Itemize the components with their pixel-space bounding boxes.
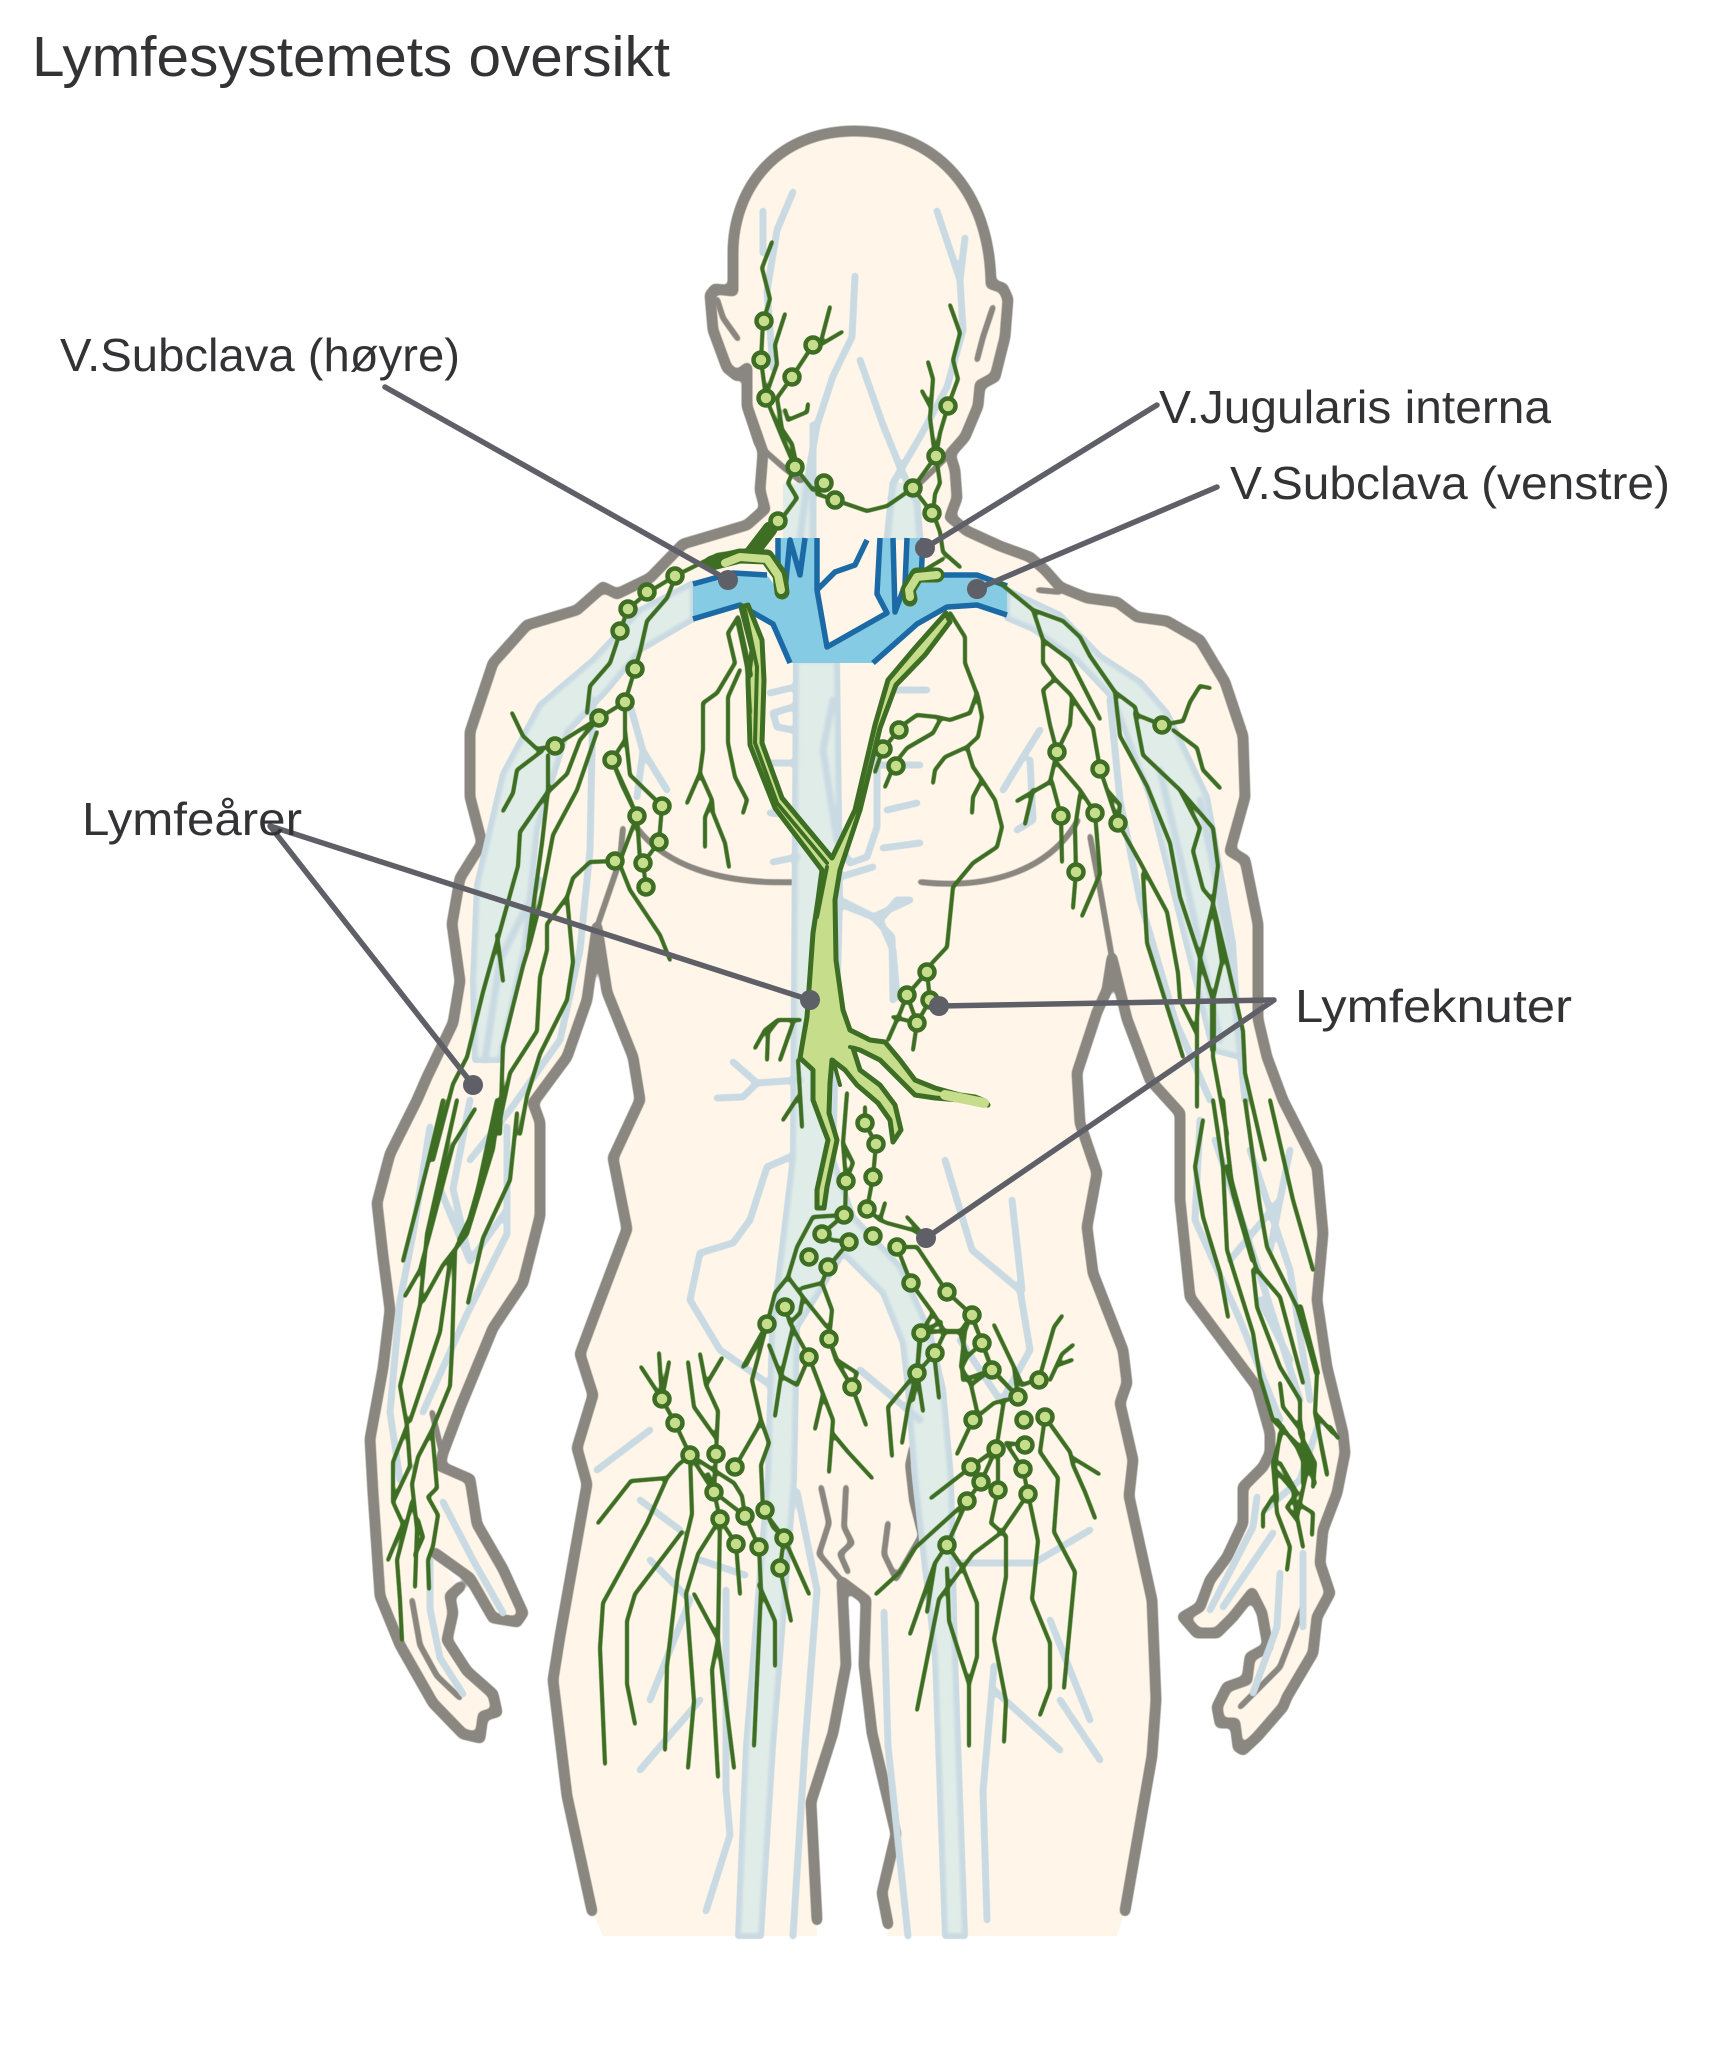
line: V.Subclava høyre xyxy=(385,387,728,580)
label: Lymfeknuter: Lymfeknuter xyxy=(1295,980,1572,1032)
thick lymph trunks xyxy=(460,620,1317,1373)
line: V.Subclava venstre xyxy=(977,487,1217,589)
callout lines xyxy=(270,387,1274,1238)
duct centre lines xyxy=(745,610,860,1085)
callout dots xyxy=(463,538,987,1248)
line: Lymfeårer xyxy=(270,826,810,1085)
label: V.Subclava (høyre): V.Subclava (høyre) xyxy=(60,329,460,381)
thin veins xyxy=(390,192,1320,1936)
thoracic duct xyxy=(741,605,988,1208)
dark blue vessel walls xyxy=(693,538,1007,663)
right lymphatic duct fill xyxy=(725,557,937,597)
skin fill xyxy=(370,131,1345,1936)
line: V.Jugularis interna xyxy=(925,405,1157,548)
neck band xyxy=(783,483,920,540)
lymph vessel network xyxy=(388,242,1338,1777)
lymph nodes xyxy=(548,314,1170,1576)
veins xyxy=(390,192,1320,1936)
body outline xyxy=(370,131,1345,1924)
vein trunk and large bands xyxy=(473,583,1240,1936)
body silhouette xyxy=(370,131,1345,1936)
blue subclavian and jugular veins xyxy=(693,538,1007,663)
interior contour lines xyxy=(412,299,1303,1707)
line: Lymfeknuter xyxy=(926,1000,1274,1238)
label: V.Subclava (venstre): V.Subclava (venstre) xyxy=(1230,457,1670,509)
lymph vessels and nodes xyxy=(388,242,1338,1777)
right lymphatic duct terminal xyxy=(712,529,937,599)
label: Lymfeårer: Lymfeårer xyxy=(82,793,302,845)
duct outline xyxy=(741,605,988,1208)
duct tail xyxy=(945,1095,984,1103)
blue fill xyxy=(693,538,1007,663)
label: V.Jugularis interna: V.Jugularis interna xyxy=(1159,381,1551,433)
title: Lymfesystemets oversikt xyxy=(32,25,670,89)
